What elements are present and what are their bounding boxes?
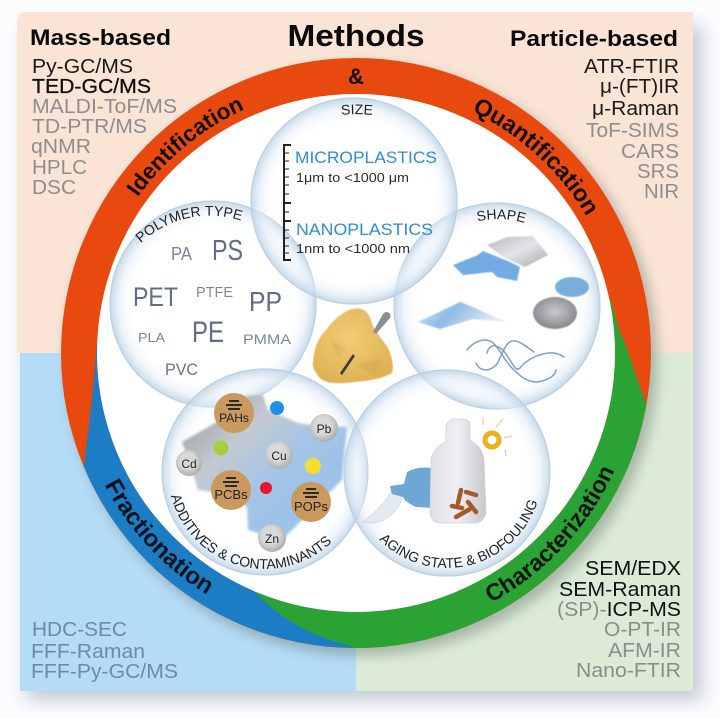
list: mass-based methods bbox=[30, 25, 177, 199]
ring label: quantification: Quantification bbox=[475, 100, 596, 216]
list: particle-based methods: ATR-FTIR bbox=[584, 56, 679, 78]
particle: Pb: Pb bbox=[317, 422, 332, 436]
particle: Cd bbox=[176, 450, 202, 476]
list: particle-based methods: NIR bbox=[644, 181, 679, 203]
bubble: shape bbox=[393, 202, 601, 410]
list: characterization methods: SEM-Raman bbox=[559, 579, 681, 601]
bubble title: size: SIZE bbox=[342, 104, 372, 115]
particle: Cd: Cd bbox=[181, 457, 197, 471]
polymer labels: PE bbox=[192, 316, 224, 349]
list: particle-based methods: CARS bbox=[621, 141, 679, 163]
bubble title: polymer type: POLYMER TYPE bbox=[135, 206, 243, 242]
particle: POPs bbox=[291, 482, 331, 522]
bubble: additives and contaminants bbox=[161, 368, 369, 576]
dot: red bbox=[260, 482, 272, 494]
icon: gray fragment bbox=[487, 236, 548, 267]
panel: mass and particle based background bbox=[17, 12, 693, 353]
polymer labels: PMMA bbox=[243, 331, 292, 347]
particle: PAHs: PAHs bbox=[219, 411, 249, 425]
polymer labels: PA bbox=[171, 244, 192, 264]
particle: PCBs bbox=[211, 470, 251, 510]
ring segment: blue bbox=[84, 340, 366, 648]
polymer labels: PLA bbox=[138, 330, 165, 345]
list: mass-based methods: Py-GC/MS bbox=[32, 56, 133, 78]
icon: blue tube bbox=[390, 468, 432, 508]
list: characterization methods bbox=[557, 558, 681, 682]
polymer labels: PVC bbox=[165, 360, 198, 379]
particle: Zn: Zn bbox=[265, 532, 279, 546]
icon: plastic pile with needles bbox=[313, 308, 393, 383]
dot: yellow bbox=[305, 458, 321, 474]
list: characterization methods: SEM/EDX bbox=[585, 558, 681, 580]
ruler scale bbox=[283, 145, 291, 260]
list: mass-based methods: Mass-based bbox=[30, 25, 171, 50]
list: characterization methods: AFM-IR bbox=[608, 640, 681, 662]
list: characterization methods: (SP)-ICP-MS bbox=[557, 599, 681, 621]
panel: fractionation background bbox=[20, 353, 356, 691]
ring label: fractionation: Fractionation bbox=[105, 478, 212, 594]
list: fractionation methods bbox=[31, 619, 178, 683]
ring segment: green bbox=[255, 298, 646, 648]
list: particle-based methods: SRS bbox=[637, 161, 679, 183]
range: nanoplastics: 1nm to <1000 nm bbox=[296, 241, 410, 256]
list: fractionation methods: FFF-Raman bbox=[31, 641, 145, 663]
list: characterization methods: O-PT-IR bbox=[604, 619, 681, 641]
central white disc bbox=[97, 94, 615, 612]
polymer labels: PET bbox=[133, 282, 178, 312]
particle: Pb bbox=[310, 414, 338, 442]
icon: blue fragment bbox=[453, 251, 520, 281]
ring segment: orange bbox=[60, 57, 652, 649]
particle: POPs: POPs bbox=[294, 499, 328, 514]
icon: sun bbox=[483, 417, 512, 456]
icon: film sheet bbox=[418, 302, 506, 329]
dot: green bbox=[214, 440, 228, 456]
particle: PCBs: PCBs bbox=[214, 487, 248, 502]
particle: PAHs bbox=[214, 393, 254, 433]
icon: spilled tube tip bbox=[363, 490, 402, 523]
panel: characterization background bbox=[356, 353, 693, 691]
ring label: characterization: Characterization bbox=[486, 468, 614, 600]
list: mass-based methods: MALDI-ToF/MS bbox=[32, 96, 177, 118]
label: nanoplastics: NANOPLASTICS bbox=[296, 220, 433, 239]
list: mass-based methods: HPLC bbox=[32, 157, 87, 179]
list: fractionation methods: HDC-SEC bbox=[32, 619, 127, 641]
ring label: identification: Identification bbox=[126, 100, 244, 196]
particle: Cu bbox=[265, 441, 293, 469]
list: characterization methods: Nano-FTIR bbox=[576, 660, 681, 682]
contaminant blob bbox=[182, 395, 347, 540]
range: microplastics: 1μm to <1000 μm bbox=[296, 170, 409, 185]
icon: fibres bbox=[467, 340, 564, 382]
icon: gray sphere bbox=[533, 297, 577, 329]
list: particle-based methods bbox=[510, 26, 679, 203]
list: particle-based methods: μ-(FT)IR bbox=[600, 76, 679, 98]
list: particle-based methods: Particle-based bbox=[510, 26, 678, 51]
polymer labels: PS bbox=[212, 235, 243, 267]
particle: Cu: Cu bbox=[271, 449, 287, 463]
list: mass-based methods: qNMR bbox=[31, 136, 91, 158]
list: particle-based methods: ToF-SIMS bbox=[586, 120, 679, 142]
ampersand: & bbox=[348, 64, 364, 89]
ring: methods bbox=[61, 58, 651, 648]
heading: methods: Methods bbox=[288, 18, 424, 53]
bubble title: additives and contaminants: ADDITIVES & CONTAMINANTS bbox=[170, 496, 331, 569]
list: particle-based methods: μ-Raman bbox=[592, 98, 679, 120]
icon: bottle bbox=[430, 419, 486, 523]
bubble: size bbox=[250, 97, 458, 305]
bubble: polymer type bbox=[109, 200, 317, 408]
list: fractionation methods: FFF-Py-GC/MS bbox=[31, 661, 178, 683]
polymer labels: PP bbox=[249, 286, 282, 317]
bubble title: aging state and biofouling: AGING STATE & BIOFOULING bbox=[379, 500, 536, 568]
ring shadow bbox=[66, 64, 658, 656]
label: microplastics: MICROPLASTICS bbox=[295, 148, 437, 167]
list: mass-based methods: DSC bbox=[32, 177, 76, 199]
bubble: aging state and biofouling bbox=[344, 369, 551, 577]
icon: blue bead bbox=[555, 277, 589, 297]
list: mass-based methods: TD-PTR/MS bbox=[32, 116, 147, 138]
polymer labels: PTFE bbox=[196, 284, 233, 301]
dot: blue bbox=[270, 401, 284, 415]
bubble title: shape: SHAPE bbox=[477, 209, 526, 223]
list: mass-based methods: TED-GC/MS bbox=[32, 76, 151, 98]
polymer labels bbox=[133, 235, 292, 379]
particle: Zn bbox=[258, 524, 286, 552]
icon: biofouling rods bbox=[452, 490, 476, 517]
